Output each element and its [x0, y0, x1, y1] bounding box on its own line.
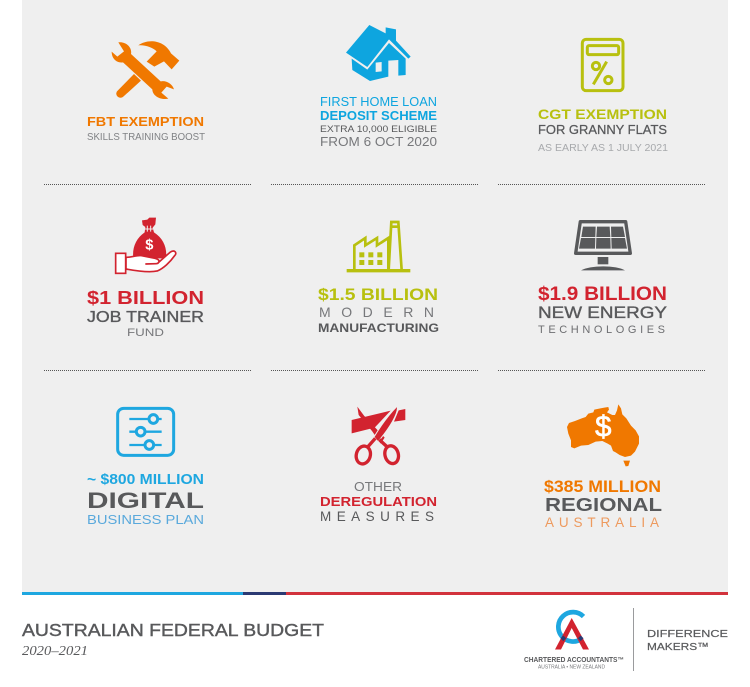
text: fund: FUND [127, 327, 164, 339]
icon: solar panel [576, 222, 630, 270]
text: other: OTHER [354, 480, 402, 494]
heading: deposit scheme: DEPOSIT SCHEME [320, 109, 437, 123]
heading: $1.9 billion: $1.9 BILLION [538, 283, 667, 305]
footer colour bar [22, 592, 728, 595]
heading: about $800 million: ~ $800 MILLION [87, 472, 204, 488]
text: technologies: TECHNOLOGIES [538, 324, 665, 336]
text: as early as 1 July 2021: AS EARLY AS 1 JULY 2021 [538, 143, 668, 154]
text: Australia and New Zealand: AUSTRALIA • NEW ZEALAND [538, 664, 605, 670]
icon: wrench and hammer [112, 41, 179, 99]
footer year: 2020–2021 [22, 643, 88, 658]
text: digital: DIGITAL [87, 488, 204, 513]
icon: sliders [118, 408, 174, 455]
text: manufacturing: MANUFACTURING [318, 323, 439, 335]
text: skills training boost: SKILLS TRAINING BOOST [87, 131, 206, 143]
text: job trainer: JOB TRAINER [87, 309, 204, 326]
panel: new energy technologies [538, 222, 667, 336]
panel: job trainer fund [87, 218, 204, 339]
text: measures: MEASURES [320, 509, 434, 524]
tagline: difference makers: DIFFERENCE [647, 628, 728, 640]
text: new energy: NEW ENERGY [538, 304, 667, 322]
icon: factory [347, 222, 410, 271]
panel: regional Australia [544, 404, 662, 530]
footer title: AUSTRALIAN FEDERAL BUDGET [22, 620, 324, 640]
text: regional: REGIONAL [545, 494, 662, 515]
panel: other deregulation measures [320, 406, 437, 524]
icon: map of Australia with dollar sign: $ [595, 411, 611, 444]
text: modern: MODERN [319, 304, 434, 320]
panel: first home loan deposit scheme [320, 25, 437, 149]
panel: CGT exemption [538, 39, 668, 154]
heading: FBT exemption: FBT EXEMPTION [87, 114, 204, 129]
logo divider [633, 608, 634, 671]
heading: $1.5 billion: $1.5 BILLION [318, 285, 438, 304]
text: Australia: AUSTRALIA [545, 515, 659, 530]
text: from 6 Oct 2020: FROM 6 OCT 2020 [320, 135, 437, 149]
heading: deregulation: DEREGULATION [320, 495, 437, 509]
icon: house [346, 25, 411, 81]
tagline: difference makers [647, 628, 728, 653]
logo: Chartered Accountants [524, 612, 624, 670]
heading: $385 million: $385 MILLION [544, 478, 661, 496]
panel: digital business plan [87, 408, 204, 527]
text: for granny flats: FOR GRANNY FLATS [538, 123, 667, 137]
text: business plan: BUSINESS PLAN [87, 512, 204, 527]
icon: percent calculator [582, 39, 623, 91]
heading: CGT exemption: CGT EXEMPTION [538, 106, 667, 122]
text: Chartered Accountants: CHARTERED ACCOUNTANTS™ [524, 657, 624, 664]
heading: $1 billion: $1 BILLION [87, 288, 204, 308]
panel: FBT exemption [87, 41, 206, 143]
icon: CA monogram [555, 612, 589, 650]
tagline: difference makers: MAKERS™ [647, 641, 709, 653]
heading: first home loan: FIRST HOME LOAN [320, 95, 437, 109]
panel: modern manufacturing [318, 222, 439, 335]
icon: hand holding money bag: $ [145, 237, 153, 253]
text: extra 10,000 eligible: EXTRA 10,000 ELIGIBLE [320, 124, 437, 135]
icon: scissors cutting ribbon [352, 406, 405, 465]
